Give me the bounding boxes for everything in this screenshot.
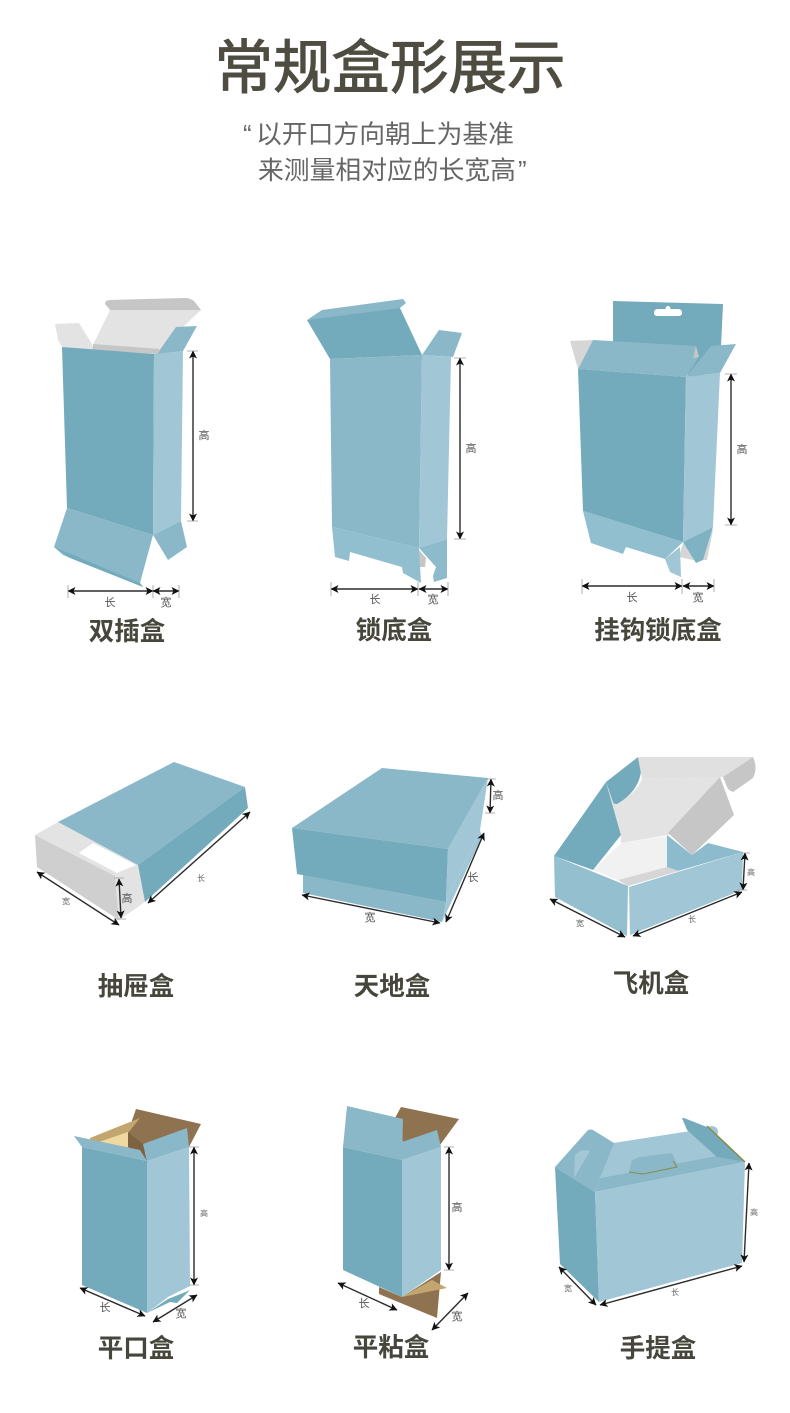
dimension: 高	[454, 358, 476, 539]
dimension: 宽: 宽	[160, 595, 172, 609]
panel: 飞机盒	[550, 757, 756, 998]
subtitle: “	[243, 121, 252, 149]
dimension: 高: 高	[122, 891, 132, 905]
panel: 双插盒	[54, 298, 210, 646]
dimension: 宽: 宽	[62, 896, 70, 906]
panel: 平口盒	[74, 1109, 208, 1363]
box illustration: 双插盒	[54, 298, 201, 587]
subtitle: 以开口方向朝上为基准	[256, 120, 514, 149]
dimension: 长: 长	[370, 593, 380, 606]
dimension: 长	[80, 1288, 145, 1316]
box illustration: 手提盒	[555, 1118, 745, 1302]
dimension: 宽	[683, 579, 714, 604]
label: 平粘盒: 平粘盒	[353, 1333, 430, 1362]
dimension: 长	[600, 1266, 742, 1305]
label: 锁底盒: 锁底盒	[356, 616, 433, 645]
label: 飞机盒: 飞机盒	[613, 969, 690, 998]
panel: 手提盒	[555, 1118, 758, 1363]
dimension: 宽: 宽	[692, 590, 704, 604]
panel: 平粘盒	[338, 1106, 468, 1362]
dimension: 高: 高	[200, 1208, 208, 1218]
dimension: 长	[68, 585, 153, 609]
box illustration: 抽屉盒	[35, 762, 248, 920]
label: 挂钩锁底盒: 挂钩锁底盒	[594, 616, 722, 645]
dimension: 长: 长	[100, 1301, 110, 1314]
dimension: 宽	[419, 582, 448, 606]
dimension: 宽	[153, 585, 179, 609]
panel: 天地盒	[292, 768, 504, 1001]
label: 天地盒: 天地盒	[354, 972, 431, 1001]
dimension: 宽: 宽	[452, 1309, 462, 1323]
dimension: 高: 高	[736, 442, 748, 456]
dimension: 高	[485, 779, 504, 813]
box illustration: 平粘盒	[343, 1106, 459, 1318]
dimension: 高: 高	[750, 1207, 758, 1217]
subtitle: 来测量相对应的长宽高	[258, 156, 516, 185]
panel: 锁底盒	[307, 299, 476, 645]
dimension: 长	[446, 833, 484, 922]
panel: 挂钩锁底盒	[570, 301, 748, 645]
dimension: 长	[582, 579, 682, 604]
box illustration: 锁底盒	[307, 299, 462, 583]
dimension: 长: 长	[197, 873, 205, 883]
dimension: 长	[633, 892, 742, 936]
dimension: 长: 长	[358, 1297, 370, 1310]
label: 抽屉盒: 抽屉盒	[98, 972, 175, 1001]
label: 手提盒: 手提盒	[620, 1334, 697, 1363]
dimension: 长: 长	[468, 871, 478, 884]
dimension: 宽: 宽	[176, 1306, 186, 1320]
dimension: 高: 高	[198, 428, 210, 442]
dimension: 高: 高	[492, 788, 504, 802]
dimension: 宽	[153, 1295, 197, 1322]
dimension: 宽: 宽	[564, 1283, 572, 1293]
dimension: 长	[331, 582, 418, 606]
dimension: 宽	[432, 1293, 468, 1330]
subtitle	[243, 120, 527, 185]
dimension: 宽: 宽	[576, 918, 584, 928]
dimension: 宽	[559, 1267, 596, 1305]
dimension: 高: 高	[466, 441, 476, 455]
box illustration: 天地盒	[292, 768, 488, 922]
dimension: 长: 长	[671, 1287, 679, 1297]
dimension: 高	[187, 351, 210, 521]
dimension: 高	[114, 878, 132, 919]
dimension: 宽: 宽	[364, 910, 376, 924]
dimension: 长	[148, 812, 250, 903]
dimension: 高	[189, 1147, 208, 1285]
dimension: 长	[338, 1283, 397, 1310]
dimension: 高	[444, 1147, 462, 1270]
box illustration: 挂钩锁底盒	[570, 301, 736, 577]
dimension: 高: 高	[747, 867, 755, 877]
box illustration: 飞机盒	[554, 757, 756, 936]
label: 双插盒: 双插盒	[89, 617, 166, 646]
panel: 抽屉盒	[35, 762, 250, 1001]
box illustration: 平口盒	[74, 1109, 201, 1313]
dimension: 高: 高	[452, 1200, 462, 1214]
dimension: 宽: 宽	[428, 592, 438, 606]
dimension: 宽	[302, 895, 440, 924]
dimension: 宽	[37, 872, 119, 925]
dimension: 高	[738, 853, 755, 890]
dimension: 高	[744, 1163, 758, 1262]
dimension: 长: 长	[104, 596, 116, 609]
dimension: 高	[725, 374, 748, 525]
label: 平口盒: 平口盒	[98, 1334, 175, 1363]
title: 常规盒形展示	[214, 36, 566, 101]
dimension: 宽	[550, 899, 625, 937]
dimension: 长: 长	[688, 914, 696, 924]
dimension: 长: 长	[626, 591, 638, 604]
subtitle: ”	[518, 157, 527, 185]
